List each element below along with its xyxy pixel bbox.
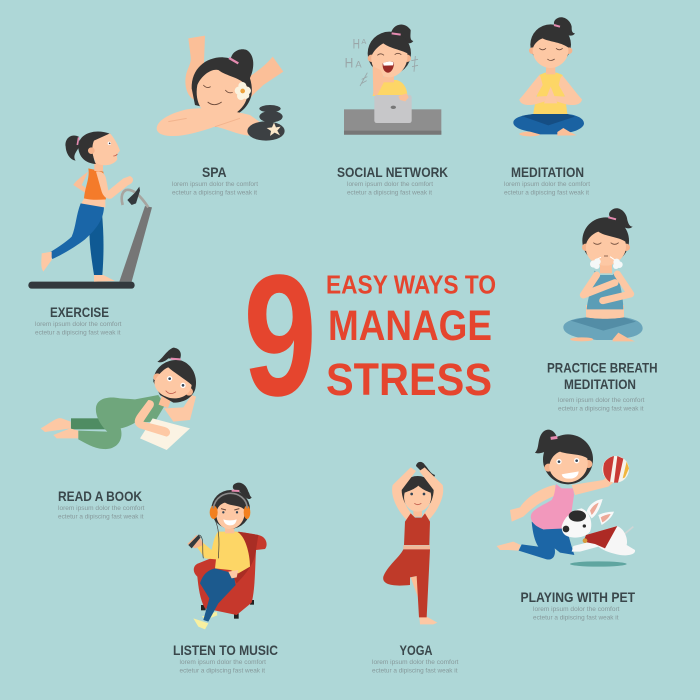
text: ha ha laughter: A — [355, 59, 362, 69]
text: social network description — [347, 181, 433, 196]
icon: laughing at laptop — [344, 25, 441, 135]
panel: playing with pet — [497, 430, 635, 621]
text: listen to music description: lorem ipsum dolor the comfort — [180, 659, 266, 666]
text: exercise description: lorem ipsum dolor the comfort — [35, 321, 122, 328]
heading: practice breath meditation — [547, 360, 658, 392]
heading: practice breath meditation: PRACTICE BREATH — [547, 360, 658, 376]
panel: read a book — [41, 348, 196, 520]
text: spa description — [172, 181, 258, 196]
icon: meditating woman — [513, 17, 584, 136]
title line: manage: MANAGE — [328, 302, 492, 350]
heading: meditation: MEDITATION — [511, 164, 584, 180]
panel: spa — [157, 36, 285, 196]
panel: listen to music — [173, 483, 278, 675]
title — [244, 238, 496, 432]
icon: tree pose — [383, 462, 443, 624]
text: breath description: ectetur a dipiscing fast weak it — [558, 405, 644, 412]
panel: exercise — [28, 132, 152, 336]
heading: exercise: EXERCISE — [50, 304, 109, 320]
icon: woman reading — [41, 348, 196, 450]
icon: woman playing with dog — [497, 430, 635, 567]
title line: easy ways to: EASY WAYS TO — [326, 270, 496, 300]
text: read a book description — [58, 505, 145, 520]
text: meditation description — [504, 181, 590, 196]
panel: yoga — [372, 462, 459, 675]
heading: playing with pet: PLAYING WITH PET — [520, 589, 635, 605]
text: social network description: lorem ipsum dolor the comfort — [347, 181, 433, 188]
text: ha ha laughter — [345, 36, 366, 70]
text: yoga description — [372, 659, 459, 675]
text: breath description: lorem ipsum dolor the comfort — [558, 397, 645, 404]
heading: listen to music: LISTEN TO MUSIC — [173, 642, 278, 658]
text: ha ha laughter: H — [345, 54, 353, 70]
title line: stress: STRESS — [326, 354, 492, 405]
heading: spa: SPA — [202, 164, 226, 180]
panel: meditation — [504, 17, 590, 196]
text: spa description: ectetur a dipiscing fast weak it — [172, 189, 257, 196]
text: exercise description — [35, 321, 122, 336]
panel: social network — [337, 25, 448, 196]
icon: woman listening in armchair — [187, 483, 267, 629]
text: playing with pet description — [533, 606, 620, 621]
icon: breathing woman — [563, 208, 643, 341]
heading: read a book: READ A BOOK — [58, 488, 142, 504]
text: breath description — [558, 397, 645, 412]
text: listen to music description — [180, 659, 266, 675]
text: ha ha laughter: A — [361, 37, 366, 46]
heading: practice breath meditation: MEDITATION — [564, 376, 636, 392]
text: playing with pet description: lorem ipsum dolor the comfort — [533, 606, 620, 613]
text: meditation description: ectetur a dipiscing fast weak it — [504, 189, 589, 196]
text: exercise description: ectetur a dipiscing fast weak it — [35, 329, 121, 336]
heading: social network: SOCIAL NETWORK — [337, 164, 448, 180]
icon: spa massage — [157, 36, 285, 141]
icon: woman on treadmill — [28, 132, 152, 289]
text: yoga description: lorem ipsum dolor the comfort — [372, 659, 459, 666]
text: playing with pet description: ectetur a dipiscing fast weak it — [533, 614, 619, 621]
text: read a book description: lorem ipsum dolor the comfort — [58, 505, 145, 512]
text: read a book description: ectetur a dipiscing fast weak it — [58, 513, 144, 520]
big number nine: 9 — [244, 238, 317, 432]
text: yoga description: ectetur a dipiscing fast weak it — [372, 668, 458, 675]
text: ha ha laughter: H — [353, 36, 360, 52]
heading: yoga: YOGA — [400, 642, 432, 658]
panel: practice breath meditation — [547, 208, 658, 412]
text: listen to music description: ectetur a dipiscing fast weak it — [180, 668, 265, 675]
text: meditation description: lorem ipsum dolor the comfort — [504, 181, 590, 188]
text: social network description: ectetur a dipiscing fast weak it — [347, 189, 432, 196]
text: spa description: lorem ipsum dolor the comfort — [172, 181, 258, 188]
